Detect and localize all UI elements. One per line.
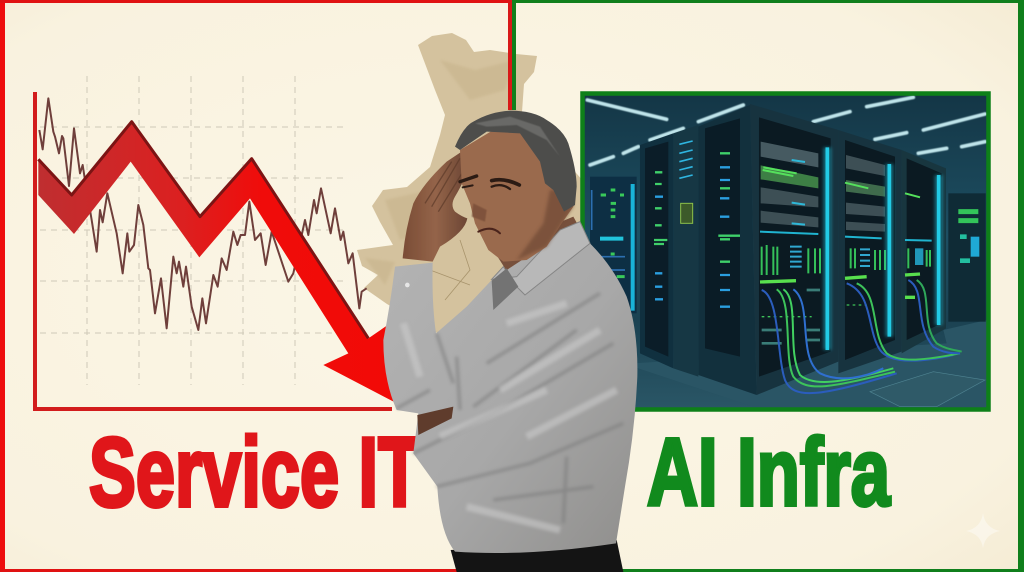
chart grid <box>40 76 345 385</box>
volatile price line <box>39 98 367 330</box>
ceiling lights <box>587 97 985 165</box>
floor grate <box>870 372 985 407</box>
server units front <box>761 142 885 232</box>
floor <box>638 320 986 368</box>
trousers <box>451 540 623 572</box>
heading: AI Infra: AI Infra <box>647 419 890 526</box>
cyan light bars <box>827 147 939 350</box>
face shadow <box>517 190 573 260</box>
photo: AI data centre server racks <box>582 94 988 410</box>
panel: service IT frame <box>0 0 512 572</box>
hidden hand under arm <box>417 407 453 435</box>
nose shadow <box>472 203 487 222</box>
circuit modules <box>762 245 930 275</box>
hair <box>455 111 577 212</box>
raised hand <box>403 152 468 262</box>
head and face <box>460 130 573 262</box>
green frame <box>582 94 988 410</box>
shirt folds <box>397 293 623 523</box>
background racks <box>590 177 637 313</box>
room backdrop <box>584 126 986 408</box>
shirt highlights <box>403 303 617 530</box>
cuff button <box>405 283 410 287</box>
brow and eyes <box>460 176 519 233</box>
network cables <box>762 280 962 393</box>
map of India <box>357 33 600 333</box>
torso and sleeves <box>383 222 637 553</box>
panel: AI infra frame <box>512 0 1024 572</box>
rack side LEDs <box>654 153 740 262</box>
grey temple hair <box>475 117 560 157</box>
neck <box>493 217 590 287</box>
rack group <box>640 104 946 395</box>
person: worried man in grey shirt <box>383 111 637 572</box>
collar <box>492 222 590 295</box>
line chart: falling stock chart <box>35 76 400 409</box>
big red down arrow <box>38 122 400 405</box>
cyan light bars glow <box>827 147 939 350</box>
heading: Service IT: Service IT <box>89 417 421 527</box>
icon: corner sparkle watermark <box>966 513 1000 548</box>
chart axes <box>35 92 392 409</box>
